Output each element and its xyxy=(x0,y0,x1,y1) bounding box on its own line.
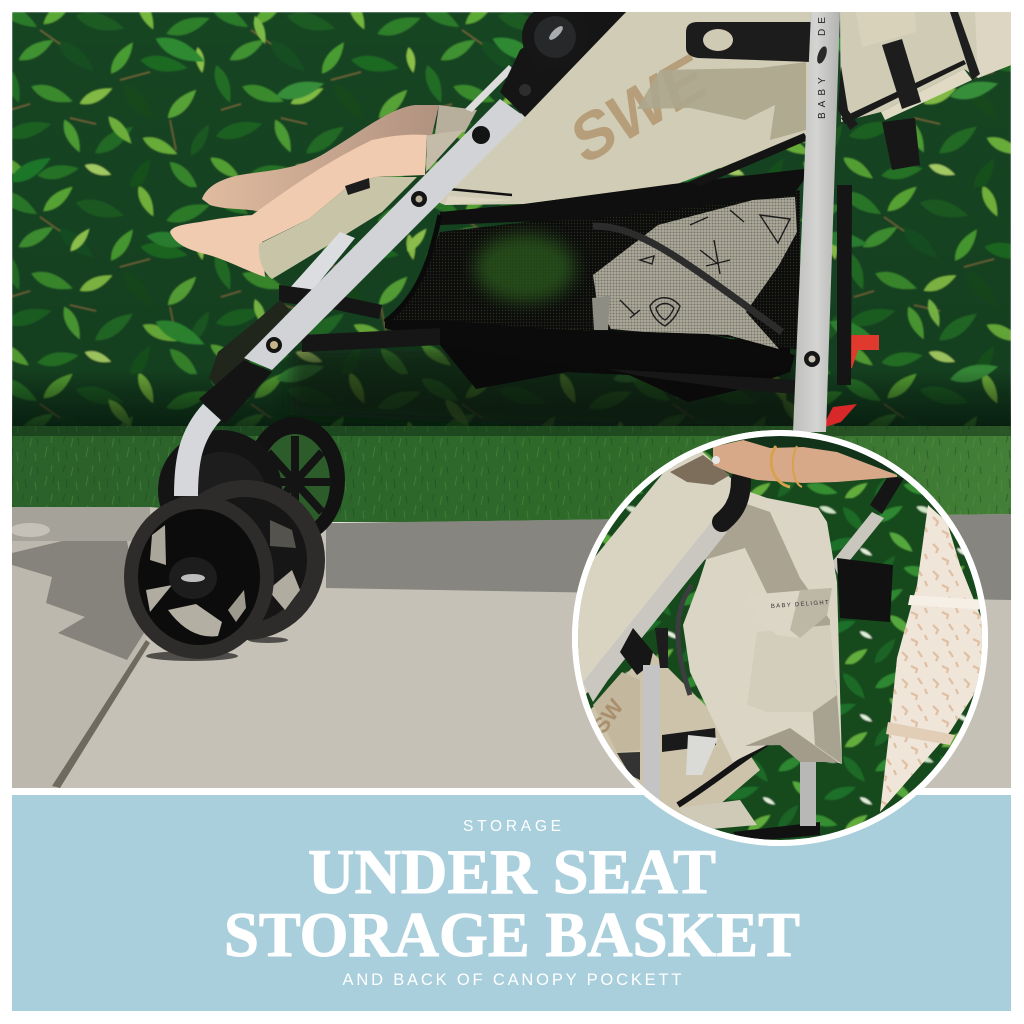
rear wheels xyxy=(158,417,345,534)
inset pocket flap: BABY DELIGHT xyxy=(771,600,830,610)
subtitle: AND BACK OF CANOPY POCKETT xyxy=(342,971,682,989)
post branding: BABY xyxy=(817,72,828,119)
title: STORAGE BASKET xyxy=(224,899,800,970)
post branding xyxy=(818,18,825,118)
title: UNDER SEAT xyxy=(308,836,716,907)
inset handle grip xyxy=(722,480,741,522)
title xyxy=(224,836,800,970)
bottom banner xyxy=(12,795,1011,1011)
front wheels xyxy=(124,480,325,659)
inset circle: back of canopy pocket xyxy=(560,425,995,850)
middle wheel xyxy=(199,480,325,640)
inset rear handle xyxy=(870,476,904,514)
inset frame rod xyxy=(583,520,727,702)
leg sleeve xyxy=(259,177,417,279)
basket rim band xyxy=(440,169,804,225)
inset dress xyxy=(880,505,985,812)
front wheel xyxy=(124,495,274,659)
logo print on seat: SWE xyxy=(563,38,714,179)
inset canopy xyxy=(578,452,732,694)
inset background hedge xyxy=(570,425,995,850)
eyebrow label: STORAGE xyxy=(463,818,561,835)
inset pocket fabric xyxy=(683,485,842,764)
post branding: DE xyxy=(817,12,828,36)
grass strip xyxy=(12,426,1011,522)
under seat storage basket xyxy=(385,133,808,402)
child legs and shorts xyxy=(170,105,477,279)
bag inside basket xyxy=(593,197,797,349)
hedge background xyxy=(12,12,1011,434)
inset hand and arm xyxy=(712,440,897,487)
photo: stroller on sidewalk xyxy=(10,4,1011,788)
inset lower seat: SW xyxy=(588,694,629,738)
inset lower seat xyxy=(580,650,820,842)
stroller frame xyxy=(186,4,811,496)
concrete sidewalk xyxy=(10,507,1011,788)
canopy and seat fabric xyxy=(420,12,1011,205)
lower basket fabric xyxy=(385,320,795,372)
vertical rear post with red clips xyxy=(793,12,879,432)
inset pocket flap xyxy=(747,588,837,712)
